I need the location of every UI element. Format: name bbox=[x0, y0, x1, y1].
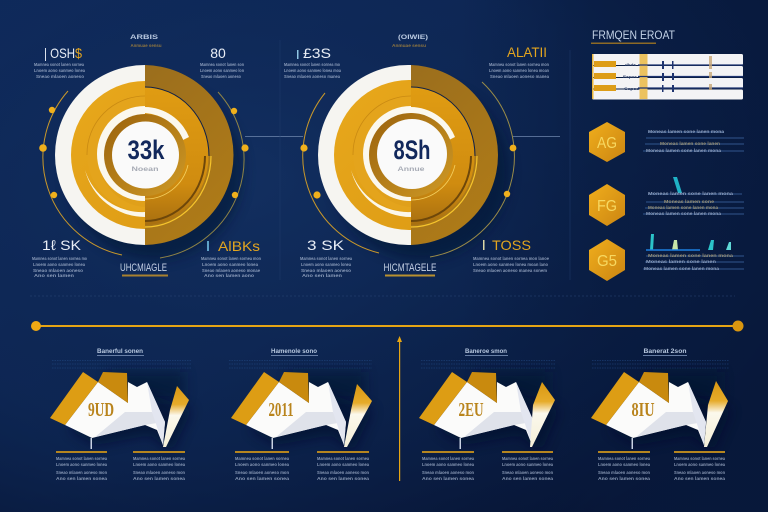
table left gold edge bbox=[592, 54, 594, 99]
callout bottom right bbox=[473, 237, 549, 273]
row labels: Gapos bbox=[624, 86, 640, 91]
table title: FRMQEN EROAT bbox=[592, 28, 676, 42]
callout top right: Lnoem aono sanmeo lon bbox=[200, 68, 244, 73]
ribbon 2 year: 2011 bbox=[268, 399, 294, 421]
callout bottom left: Lnoem aono sanmeo lonea bbox=[33, 262, 85, 267]
callout top centre: Anmuae sensu bbox=[130, 43, 162, 48]
callout top centre bbox=[130, 34, 162, 48]
donut 1 left half bbox=[55, 65, 145, 245]
callout bottom left: Sneao mlaoen aoneso bbox=[33, 268, 83, 273]
panel: ribbon 2 bbox=[229, 348, 373, 481]
ribbon 2 column left: Lnoem aono sanmeo lonea bbox=[235, 462, 289, 467]
callout top left: Mamnea sonot lanen sornea mo bbox=[284, 62, 340, 67]
donut 2 centre disc bbox=[377, 119, 447, 189]
callout top right: Mamnea sonot lanen son bbox=[200, 62, 244, 67]
ribbon 4 column left bbox=[598, 451, 650, 481]
callout bottom right: AlBKs bbox=[218, 238, 260, 254]
ribbon 1 heading: Banerful sonen bbox=[97, 348, 143, 355]
ribbon 4 year: 8IU bbox=[632, 399, 654, 421]
ribbon 4 column right bbox=[674, 451, 725, 481]
callout top centre: Anmuae sensu bbox=[392, 43, 426, 48]
ribbon 1 column left: Mamnea sonot lanen sornea bbox=[56, 456, 107, 461]
hexagon 2 item: Moneas lamen sone bbox=[664, 199, 715, 204]
ribbon 3 shape bbox=[419, 372, 559, 452]
hexagon 3 item: Moneas lamen sone lanen bbox=[646, 259, 716, 264]
panel: ribbon 3 bbox=[419, 348, 559, 481]
callout top left: Sneao mlaoen aoneso manea bbox=[284, 74, 340, 79]
hexagon 1 item: Moneas lamen sone lanen bbox=[660, 141, 720, 146]
row labels: dkds bbox=[625, 62, 637, 67]
callouts: left donut bbox=[32, 34, 261, 278]
callout top right: Sneao mlaoen aoneso bbox=[201, 74, 241, 79]
callout top left: Lnoem aono sanmeo lonea moa bbox=[284, 68, 341, 73]
panel: right donut bbox=[300, 65, 516, 260]
callout top right: ALATII bbox=[507, 44, 547, 60]
ribbon 1 column right bbox=[133, 451, 185, 481]
ribbon 1 year: 9UD bbox=[88, 399, 114, 421]
ribbon 1 column right: Sneao mlaoen aoneso mon bbox=[133, 470, 185, 475]
donut 1 ring highlight bbox=[145, 165, 188, 199]
donut 1 caption: Noean bbox=[132, 167, 159, 173]
ribbon 3 column right: Lnoem aono sanmeo lonea bbox=[502, 462, 553, 467]
ribbon 4 column right: Ano sen lamen sonea bbox=[674, 476, 725, 481]
callout bottom right: Mamnea sonot lanen sornea mon bbox=[201, 256, 261, 261]
donut 2 right half bbox=[411, 65, 498, 245]
ribbon 1 column right: Mamnea sonot lanen sornea bbox=[133, 456, 185, 461]
ribbon 2 column left: Ano sen lamen sonea bbox=[235, 476, 290, 481]
ribbon 4 column left: Sneao mlaoen aoneso mon bbox=[598, 470, 650, 475]
callout bottom left: 1ℓ SK bbox=[42, 237, 82, 253]
donut 2 shadow bbox=[333, 84, 509, 260]
callout top left: £3S bbox=[303, 45, 331, 61]
callout top right bbox=[200, 45, 244, 79]
ribbon 2 shape bbox=[231, 372, 373, 452]
ribbon 2 column right: Lnoem aono sanmeo lonea bbox=[317, 462, 369, 467]
ribbon 2 column left: Mamnea sonot lanen sornea bbox=[235, 456, 289, 461]
ribbon 3 column left: Lnoem aono sanmeo lonea bbox=[422, 462, 474, 467]
ribbon 4 column right: Mamnea sonot lanen sornea bbox=[674, 456, 725, 461]
ribbon 1 shape bbox=[50, 372, 192, 452]
ribbon 1 header band bbox=[52, 360, 191, 400]
donut 2 outer arcs bbox=[303, 82, 514, 257]
ribbon 3 column right: Sneao mlaoen aoneso mon bbox=[502, 470, 553, 475]
callout bottom left: Lnoem aono sanmeo lonea bbox=[301, 262, 351, 267]
ribbon 4 column right: Sneao mlaoen aoneso mon bbox=[674, 470, 725, 475]
ribbon 3 column right: Ano sen lamen sonea bbox=[502, 476, 553, 481]
hexagon 1 item: Moneas lamen sone lanen mona bbox=[646, 148, 721, 153]
ribbon 4 shape bbox=[591, 372, 731, 452]
row labels bbox=[623, 62, 640, 91]
callout bottom right bbox=[201, 238, 261, 278]
callout bottom right: Sneao mlaoen aoneso monae bbox=[202, 268, 260, 273]
ribbon 2 column right: Mamnea sonot lanen sornea bbox=[317, 456, 369, 461]
callout bottom right: Lnoem aono sanmeo lonea moan lano bbox=[473, 262, 548, 267]
callout top right: Mamnea sonot lanen sornea mon bbox=[489, 62, 549, 67]
ribbon 2 column right: Ano sen lamen sonea bbox=[317, 476, 369, 481]
callout top left: $ bbox=[75, 45, 82, 61]
callout bottom centre: UHCMIAGLE bbox=[120, 262, 167, 274]
callout top right: Sneao mlaoen aoneso manea bbox=[490, 74, 549, 79]
callout bottom left bbox=[32, 237, 87, 278]
ribbon 4 heading: Banerat 2son bbox=[644, 348, 687, 355]
panel: top right table bbox=[591, 28, 743, 100]
donut 2 left half bbox=[318, 65, 411, 245]
ribbon 4 header band bbox=[592, 360, 729, 400]
ribbon 3 column right bbox=[502, 451, 553, 481]
row markers bbox=[662, 61, 674, 92]
row labels: Eapos bbox=[623, 74, 638, 79]
ribbon 3 heading: Baneroe smon bbox=[465, 348, 507, 355]
hexagon 3 item: Moneas lamen sone lanen mona bbox=[648, 253, 734, 258]
ribbon 4 column left: Mamnea sonot lanen sornea bbox=[598, 456, 650, 461]
arrow: vertical axis bbox=[397, 336, 402, 481]
panel: ribbon 4 bbox=[591, 348, 731, 481]
donut 1 arc dots bbox=[39, 107, 249, 198]
donut 1 inner ring bbox=[104, 114, 186, 196]
callout top centre bbox=[392, 34, 428, 48]
callout bottom right: Sneao mlaoen aoneso manea sonem bbox=[473, 268, 547, 273]
callout bottom right: Mamnea sonot lanen sornea mon lanoe bbox=[473, 256, 549, 261]
ribbon 3 column left: Ano sen lamen sonea bbox=[422, 476, 474, 481]
ribbon 3 column left: Sneao mlaoen aoneso mon bbox=[422, 470, 474, 475]
row track lines bbox=[638, 65, 743, 88]
ribbon 1 column right: Ano sen lamen sonea bbox=[133, 476, 185, 481]
callouts: right donut bbox=[284, 34, 549, 278]
callout bottom left: Mamnea sonot lanen sornea mo bbox=[32, 256, 87, 261]
callout bottom centre: HICMTAGELE bbox=[384, 262, 436, 274]
callout top left: Sneao mlaoen aoneso bbox=[36, 74, 84, 79]
donut 2 value: 8Sh bbox=[394, 135, 430, 165]
callout bottom centre bbox=[384, 262, 436, 276]
hexagon 3 item: Moneas lamen sone lanen mona bbox=[644, 266, 719, 271]
hexagon 2 item bbox=[589, 177, 744, 226]
callout bottom centre bbox=[120, 262, 168, 276]
ribbon 4 column left: Lnoem aono sanmeo lonea bbox=[598, 462, 650, 467]
donut 1 right half bbox=[145, 65, 234, 245]
donut 2 ring highlight bbox=[411, 165, 455, 200]
ribbon 3 year: 2EU bbox=[458, 399, 484, 421]
callout top left: Lnoem aono sanmeo lonea bbox=[34, 68, 85, 73]
callout top centre: (OIWIE) bbox=[398, 34, 428, 41]
callout top left: Mamnea sonot lanen sornea bbox=[34, 62, 84, 67]
title underline bbox=[591, 42, 656, 44]
donut 1 value: 33k bbox=[128, 135, 165, 165]
callout top left: | OSH bbox=[44, 45, 75, 61]
donut shadow bbox=[67, 84, 243, 260]
callout bottom left: Ano sen lamen bbox=[302, 273, 342, 278]
panel: hexagon list bbox=[589, 122, 744, 281]
hexagon 1 item: AG bbox=[597, 135, 617, 152]
hexagon 1 item: Moneas lamen sone lanen mona bbox=[648, 129, 724, 134]
callout top right: 80 bbox=[210, 45, 226, 61]
donut 1 outer arcs bbox=[43, 91, 244, 258]
callout bottom right: Lnoem aono sanmeo lonea bbox=[202, 262, 258, 267]
panel: left donut bbox=[39, 65, 249, 260]
callout top left bbox=[34, 45, 85, 79]
callout bottom left: Sneao mlaoen aoneso bbox=[301, 268, 351, 273]
row tan markers bbox=[709, 56, 712, 90]
timeline bbox=[31, 320, 744, 332]
donut 2 shapes bbox=[318, 65, 498, 245]
ribbon 1 column left: Sneao mlaoen aoneso mon bbox=[56, 470, 107, 475]
row gold bars bbox=[594, 61, 616, 91]
ribbon 2 column left: Sneao mlaoen aoneso mon bbox=[235, 470, 289, 475]
callout bottom left: Ano sen lamen bbox=[34, 273, 74, 278]
ribbon 2 column right bbox=[317, 451, 369, 481]
callout bottom right: TOSS bbox=[492, 237, 531, 253]
ribbon 2 heading: Hamenole sono bbox=[271, 348, 317, 355]
ribbon 4 column left: Ano sen lamen sonea bbox=[598, 476, 650, 481]
callout bottom right: Ano sen lamen aono bbox=[204, 273, 254, 278]
ribbon 2 header band bbox=[229, 360, 372, 400]
callout top right: Lnoem aono sanmeo lonea moan bbox=[489, 68, 549, 73]
ribbon 1 column left bbox=[56, 451, 107, 481]
ribbon 4 column right: Lnoem aono sanmeo lonea bbox=[674, 462, 725, 467]
hexagon 2 item: Moneas lamen sone lanen mona bbox=[648, 205, 718, 210]
table gold column bbox=[640, 54, 648, 99]
table rows bbox=[592, 54, 743, 100]
ribbon 2 column right: Sneao mlaoen aoneso mon bbox=[317, 470, 369, 475]
callout bottom left bbox=[300, 237, 352, 278]
callout top left bbox=[284, 45, 341, 79]
donut 1 centre disc bbox=[112, 122, 179, 188]
ribbon 3 header band bbox=[421, 360, 555, 400]
callout bottom left: 3 SK bbox=[307, 237, 345, 253]
hexagon 2 item: Moneas lamen sone lanen mona bbox=[648, 191, 734, 196]
donut 2 arc dots bbox=[300, 144, 516, 199]
callout top right bbox=[489, 44, 549, 79]
ribbon 2 column left bbox=[235, 451, 290, 481]
donut 2 caption: Annue bbox=[398, 167, 425, 173]
donut 2 inner ring bbox=[369, 113, 453, 197]
callout bottom left: Mamnea sonot lanen sornea bbox=[300, 256, 352, 261]
hexagon 3 item: G5 bbox=[597, 253, 617, 270]
hexagon 3 item bbox=[589, 234, 744, 281]
panel: ribbon 1 bbox=[50, 348, 192, 481]
ribbon 3 column left bbox=[422, 451, 474, 481]
ribbon 3 column right: Mamnea sonot lanen sornea bbox=[502, 456, 553, 461]
ribbon 3 column left: Mamnea sonot lanen sornea bbox=[422, 456, 474, 461]
callout top centre: ARBIS bbox=[130, 34, 159, 41]
hexagon 2 item: Moneas lamen sone lanen mona bbox=[646, 211, 721, 216]
ribbon 1 column left: Lnoem aono sanmeo lonea bbox=[56, 462, 107, 467]
hexagon 1 item bbox=[589, 122, 744, 162]
ribbon 1 column right: Lnoem aono sanmeo lonea bbox=[133, 462, 185, 467]
ribbon 1 column left: Ano sen lamen sonea bbox=[56, 476, 107, 481]
hexagon 2 item: FG bbox=[597, 198, 617, 215]
